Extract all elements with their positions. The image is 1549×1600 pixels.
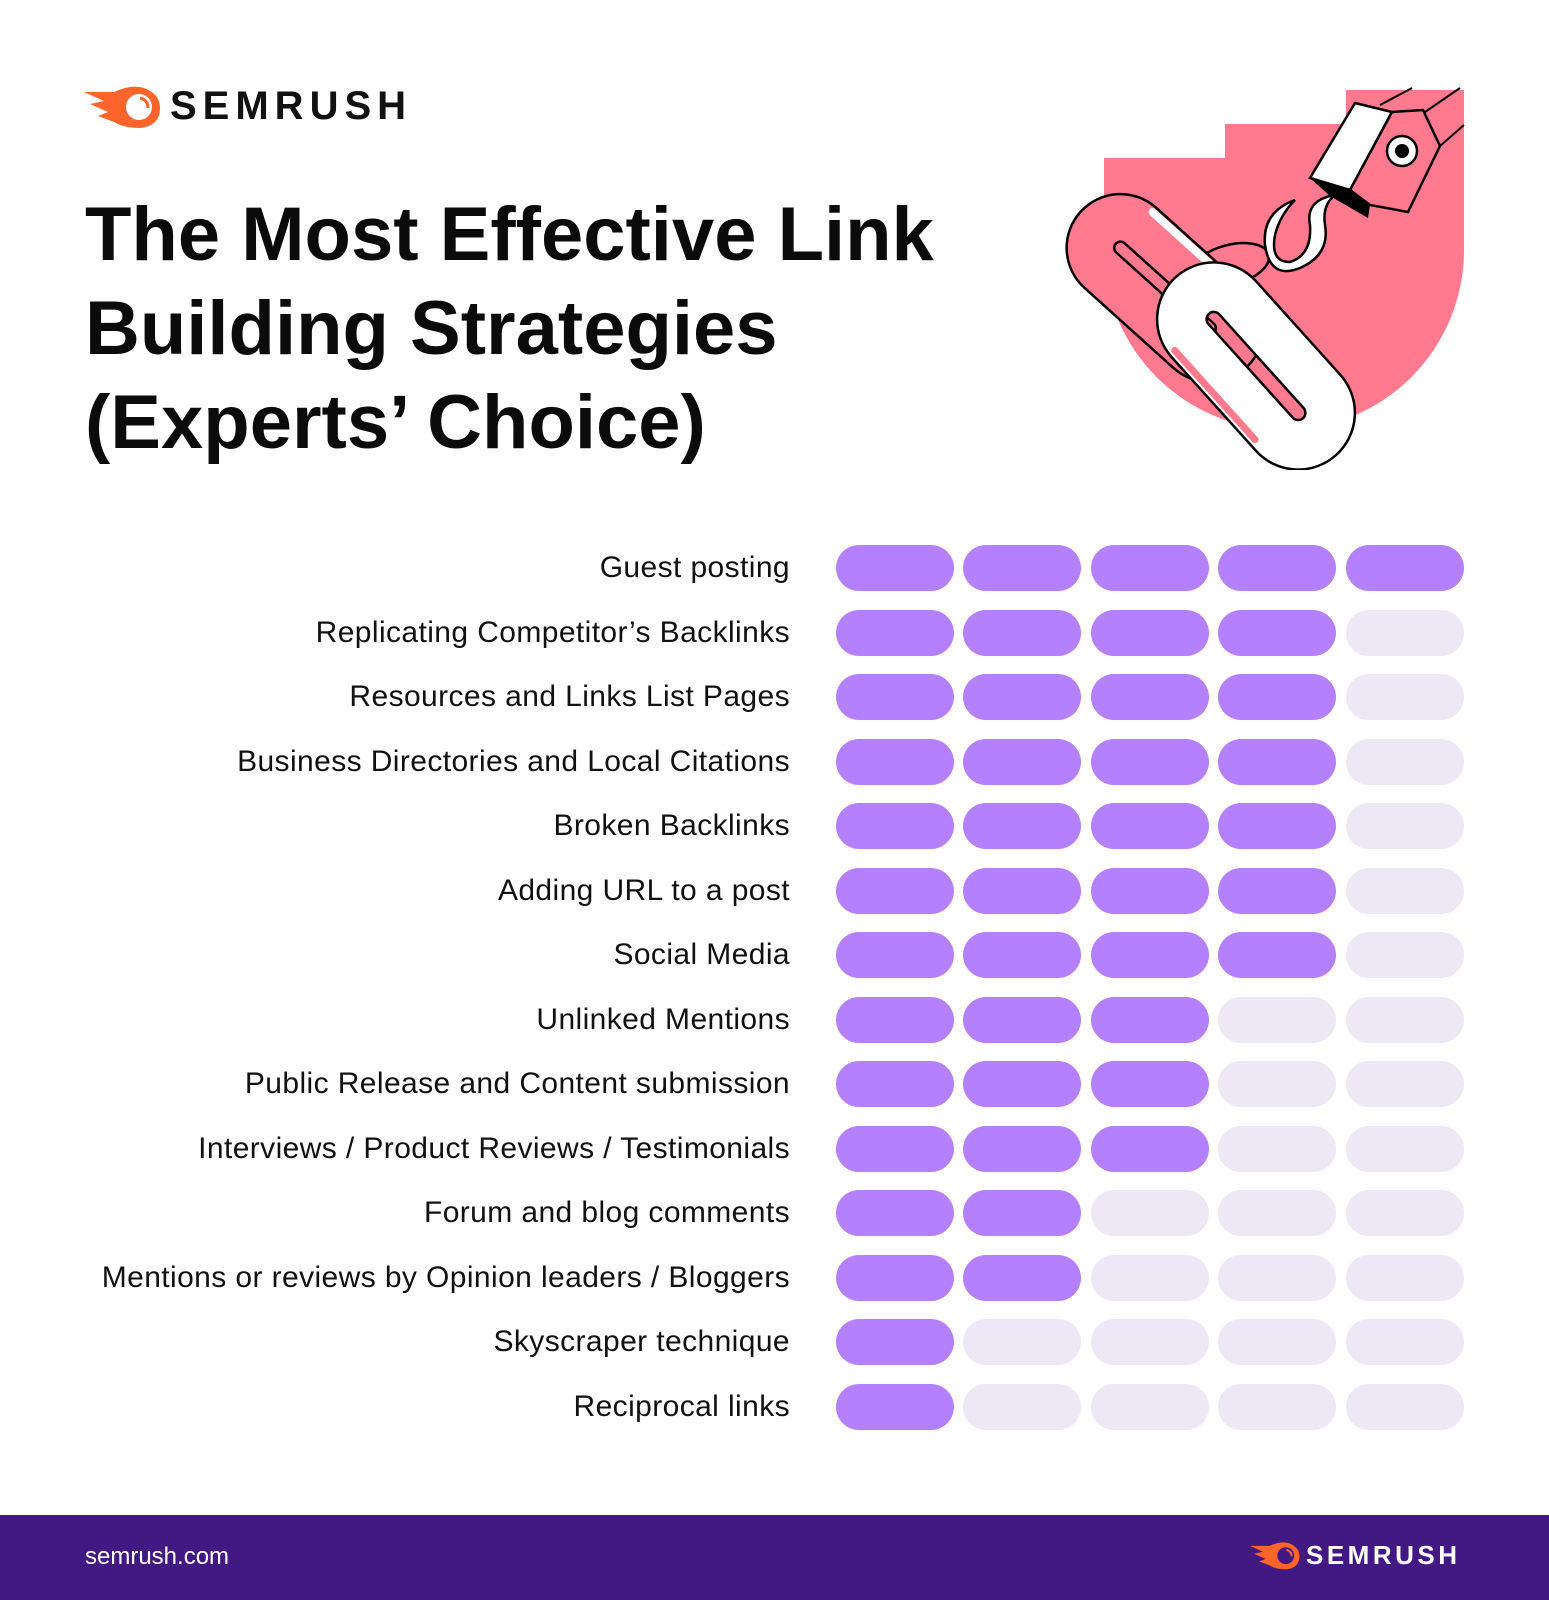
chart: strategy ratings: Broken Backlinks — [554, 809, 790, 842]
row labels — [102, 551, 790, 1422]
chart: strategy ratings: Reciprocal links — [574, 1390, 790, 1422]
logo: semrush top: SEMRUSH — [170, 84, 412, 128]
chart: strategy ratings: Resources and Links List Pages — [349, 680, 790, 713]
footer — [0, 1515, 1549, 1600]
chart: strategy ratings — [102, 545, 1464, 1430]
chart: strategy ratings: Guest posting — [600, 551, 790, 584]
title — [85, 192, 934, 465]
rating pills — [836, 545, 1464, 1430]
footer logo: SEMRUSH — [1306, 1540, 1461, 1570]
title: The Most Effective Link — [85, 192, 934, 277]
chart: strategy ratings: Mentions or reviews by Opinion leaders / Bloggers — [102, 1260, 790, 1294]
chart: strategy ratings: Adding URL to a post — [498, 874, 790, 906]
chart: strategy ratings: Replicating Competitor’s Backlinks — [316, 616, 790, 648]
chart: strategy ratings: Interviews / Product Reviews / Testimonials — [198, 1132, 790, 1164]
chart: strategy ratings: Social Media — [613, 938, 790, 971]
footer url: semrush.com — [85, 1543, 229, 1570]
title: Building Strategies — [85, 286, 778, 371]
chart: strategy ratings: Forum and blog comments — [424, 1196, 790, 1229]
chart: strategy ratings: Business Directories and Local Citations — [237, 744, 790, 778]
chart: strategy ratings: Unlinked Mentions — [536, 1002, 790, 1036]
chart: strategy ratings: Public Release and Content submission — [245, 1067, 790, 1100]
illustration: chain on crane hook — [1065, 87, 1465, 470]
title: (Experts’ Choice) — [85, 380, 706, 465]
chart: strategy ratings: Skyscraper technique — [494, 1325, 790, 1358]
